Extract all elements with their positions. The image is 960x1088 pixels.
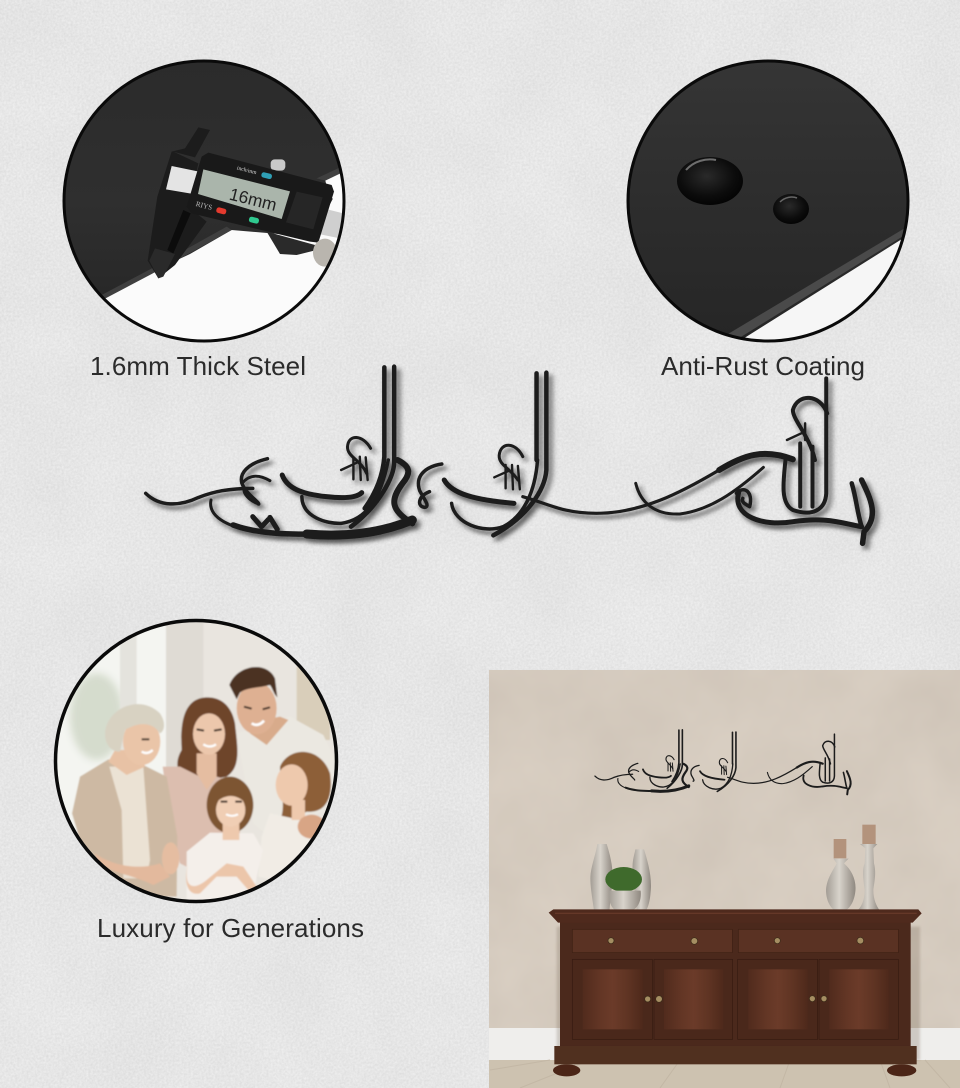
sheet edge [102, 227, 232, 299]
white table surface [106, 198, 342, 340]
right vase [633, 849, 651, 911]
jaw tip [149, 248, 175, 278]
father eyes [244, 707, 270, 709]
left foot [553, 1064, 580, 1076]
coated steel sheet [628, 61, 908, 341]
center girl hair [207, 777, 253, 833]
mode label: RIYS [195, 199, 213, 212]
center girl fringe [212, 788, 249, 807]
main calligraphy wall art [146, 367, 872, 543]
plant [605, 867, 642, 892]
white surface corner [745, 240, 901, 340]
jaw slot [167, 210, 191, 253]
cabinet body [560, 922, 911, 1047]
cabinet top [549, 909, 922, 923]
grandma cardigan [72, 759, 177, 897]
father shirt [296, 720, 326, 740]
floor [489, 1060, 960, 1088]
mother blouse [163, 767, 240, 870]
mother smile [203, 744, 216, 746]
right scale strip [321, 210, 342, 238]
panel: room scene [489, 670, 960, 1088]
knobs [608, 937, 864, 1002]
plant pot [609, 891, 641, 912]
scale strip [166, 166, 199, 194]
father face [237, 682, 277, 734]
tall candle [862, 825, 876, 844]
sheet edge highlight [728, 228, 908, 340]
lcd screen [198, 169, 290, 219]
foliage in window [70, 673, 123, 760]
caption: anti-rust coating: Anti-Rust Coating [661, 351, 865, 381]
sideboard [549, 825, 922, 1076]
right girl dress [258, 813, 310, 880]
mother hair [177, 697, 237, 783]
red button [216, 207, 226, 214]
right foot [887, 1064, 916, 1076]
small water droplet [773, 194, 809, 224]
center girl eyes [221, 799, 242, 805]
panel: anti-rust coating photo [628, 61, 910, 345]
center girl face [216, 793, 245, 827]
floor plank lines [490, 1060, 950, 1088]
grandma face [123, 718, 160, 765]
grandma neck [108, 750, 145, 775]
grandma hair [105, 704, 164, 752]
room calligraphy [595, 730, 851, 794]
grandma eyes [142, 736, 149, 742]
speaker grille [286, 192, 323, 229]
candlestick [858, 844, 879, 910]
father smile [252, 721, 264, 725]
room backdrop [176, 622, 334, 899]
right girl neck [292, 800, 305, 820]
room wall [489, 670, 960, 1028]
roller knob [313, 239, 337, 267]
center girl arms [186, 863, 257, 894]
father hair [229, 667, 277, 699]
father neck [248, 717, 288, 745]
top right sheet edge [317, 168, 340, 180]
center girl smile [226, 814, 238, 816]
center girl neck [223, 823, 239, 840]
right girl face [276, 764, 308, 806]
large water droplet [677, 157, 743, 205]
right drawer [738, 929, 898, 953]
right round vase [826, 859, 856, 912]
center girl dress [187, 833, 263, 900]
right window [297, 667, 330, 740]
thumb screw [271, 159, 285, 171]
caliper jaw [148, 127, 210, 278]
short candle [834, 839, 846, 858]
window [53, 618, 167, 832]
top right white corner [325, 174, 342, 199]
blue button [261, 172, 272, 179]
thumb roller [268, 233, 315, 255]
mother face [193, 713, 225, 755]
grandma smile [142, 750, 153, 753]
right girl hair [277, 752, 331, 827]
door panels [583, 969, 889, 1029]
baseboard [489, 1028, 960, 1060]
dark steel sheet [66, 62, 340, 295]
caliper body [187, 153, 334, 243]
mother neck [197, 753, 217, 790]
window frame [120, 630, 137, 757]
grandma arm [95, 853, 170, 885]
shaded wall pillar [166, 618, 203, 772]
green button [248, 216, 259, 224]
caption: steel thickness: 1.6mm Thick Steel [90, 351, 306, 381]
grandma hands [162, 842, 179, 874]
lcd reading: 16mm [227, 184, 279, 215]
door frames [572, 959, 898, 1039]
father hand [298, 815, 326, 839]
top highlight [555, 913, 917, 914]
grandma top [109, 767, 150, 878]
cabinet base [554, 1046, 917, 1064]
panel: steel thickness photo [60, 60, 350, 350]
mother eyes [197, 729, 222, 731]
left vase [590, 844, 613, 911]
wall mottling [489, 670, 960, 1028]
cabinet soft shadow [557, 927, 920, 1060]
left drawer [572, 929, 732, 953]
panel: family photo [53, 618, 340, 905]
caption: luxury: Luxury for Generations [97, 913, 364, 943]
small printed labels: inch/mm [236, 165, 258, 176]
